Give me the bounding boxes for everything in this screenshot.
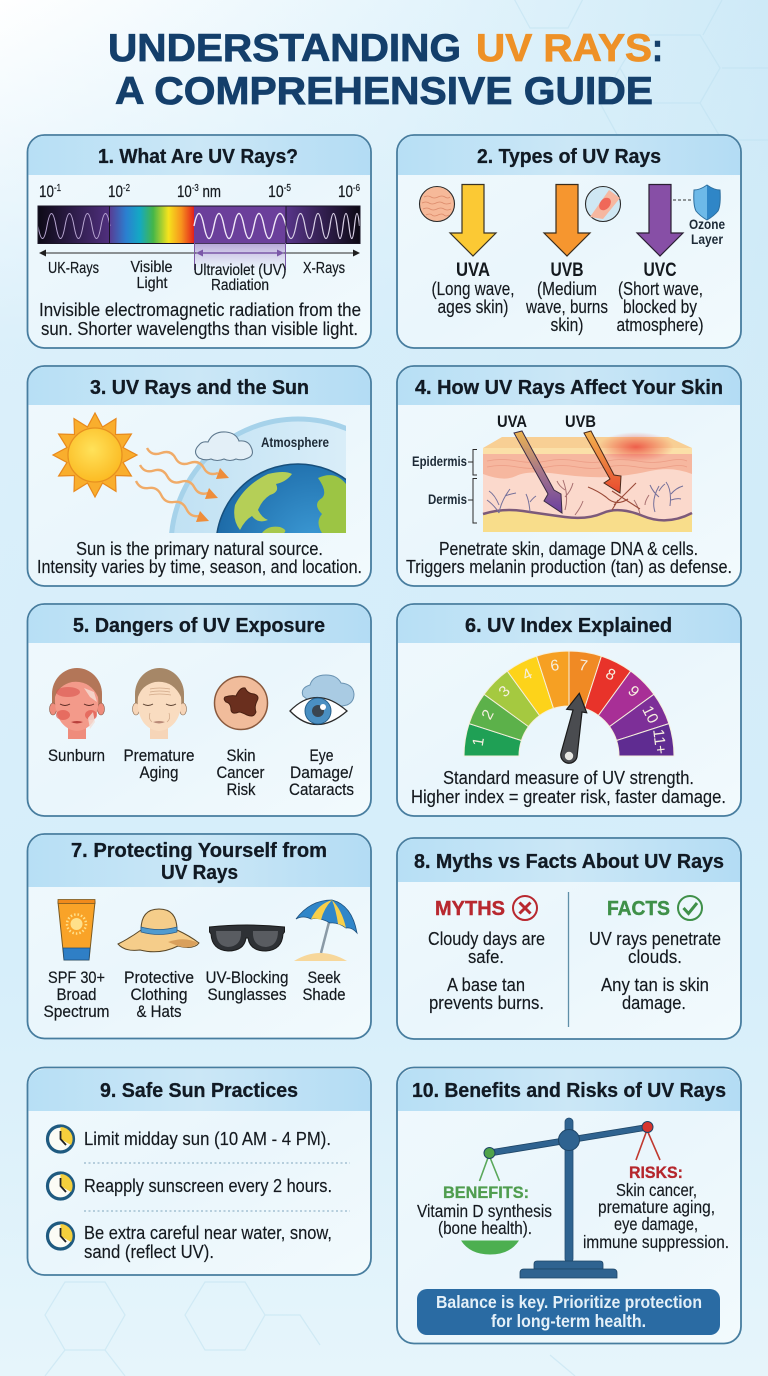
description 6 bbox=[411, 767, 726, 807]
UVA text: ages skin) bbox=[438, 296, 508, 317]
gauge numbers bbox=[470, 657, 669, 755]
description 6: Standard measure of UV strength. bbox=[443, 767, 694, 788]
danger labels: Skin bbox=[226, 746, 256, 765]
gauge numbers: 6 bbox=[549, 657, 560, 675]
benefits text and bowl: Vitamin D synthesis bbox=[417, 1201, 552, 1221]
gauge numbers: 4 bbox=[520, 665, 535, 684]
UVC text: (Short wave, bbox=[618, 278, 703, 299]
description 1 bbox=[39, 299, 361, 339]
atmosphere label: Atmosphere bbox=[261, 434, 329, 450]
icon: clock 1 bbox=[48, 1126, 74, 1152]
danger labels: Premature bbox=[124, 746, 194, 765]
danger labels: Risk bbox=[226, 780, 256, 799]
heading 4: 4. How UV Rays Affect Your Skin bbox=[415, 376, 723, 399]
heading 9: 9. Safe Sun Practices bbox=[100, 1079, 298, 1102]
wavelength scale numbers: -6 bbox=[353, 183, 360, 194]
myths column: prevents burns. bbox=[429, 992, 544, 1013]
UVB text: UVB bbox=[550, 260, 584, 281]
balance callout banner: Balance is key. Prioritize protection bbox=[436, 1292, 702, 1312]
tip 1: Limit midday sun (10 AM - 4 PM). bbox=[84, 1128, 331, 1149]
myths column: Cloudy days are bbox=[428, 928, 545, 949]
arrows: wavy UV rays bbox=[136, 448, 229, 522]
UVC text: blocked by bbox=[623, 296, 698, 317]
ozone shield and label: Layer bbox=[691, 231, 723, 247]
ozone shield and label bbox=[673, 185, 725, 247]
UVA text: UVA bbox=[456, 260, 490, 281]
arrow: UVA into skin: UVA bbox=[497, 412, 527, 431]
arrow: UVA into skin bbox=[497, 412, 562, 513]
protection labels: UV-Blocking bbox=[206, 968, 288, 987]
risks text: eye damage, bbox=[614, 1214, 698, 1234]
spectrum labels: UK-Rays bbox=[48, 260, 99, 277]
danger labels: Eye bbox=[310, 746, 334, 765]
wavelength scale numbers: -2 bbox=[123, 183, 130, 194]
ozone shield and label: Ozone bbox=[689, 216, 725, 232]
heading 5: 5. Dangers of UV Exposure bbox=[73, 614, 325, 637]
heading 6: 6. UV Index Explained bbox=[465, 614, 672, 637]
icon: damaged eye with cloud bbox=[290, 675, 354, 724]
wavelength scale numbers: 10 bbox=[177, 182, 196, 201]
protection labels: & Hats bbox=[136, 1002, 182, 1021]
title: UV RAYS bbox=[476, 27, 652, 70]
icon: sunglasses bbox=[210, 925, 284, 951]
wavelength scale numbers: 10 bbox=[268, 182, 287, 201]
tip 3: sand (reflect UV). bbox=[84, 1241, 214, 1262]
icon: premature aging face bbox=[132, 668, 186, 739]
gauge numbers: 2 bbox=[479, 707, 498, 722]
gauge numbers: 7 bbox=[578, 657, 589, 675]
wavelength scale numbers: -5 bbox=[284, 183, 291, 194]
risks text: RISKS: bbox=[629, 1163, 683, 1182]
panel: 8 myths vs facts bbox=[397, 838, 741, 1039]
heading 2: 2. Types of UV Rays bbox=[477, 145, 661, 168]
UVB text bbox=[525, 260, 608, 335]
gauge numbers: 9 bbox=[624, 683, 642, 701]
wavelength scale numbers: nm bbox=[199, 182, 221, 201]
facts column: FACTS bbox=[607, 898, 670, 920]
risks text: immune suppression. bbox=[583, 1232, 729, 1252]
wavelength scale numbers bbox=[39, 182, 360, 201]
icon: sun bbox=[53, 413, 137, 497]
UVB text: skin) bbox=[550, 314, 584, 335]
epidermis and dermis labels: Epidermis bbox=[412, 453, 467, 469]
UVA text bbox=[432, 260, 514, 317]
panel: 10 benefits and risks bbox=[397, 1068, 741, 1344]
gauge numbers: 3 bbox=[496, 683, 514, 701]
spectrum labels bbox=[48, 259, 345, 294]
risks text bbox=[583, 1163, 729, 1252]
protection labels: Clothing bbox=[130, 985, 188, 1004]
balance callout banner: for long-term health. bbox=[491, 1311, 646, 1331]
icon: sun hat bbox=[118, 909, 199, 952]
UVA text: (Long wave, bbox=[432, 278, 514, 299]
icon: clock 2 bbox=[48, 1173, 74, 1199]
spectrum labels: Radiation bbox=[211, 277, 269, 294]
wavelength scale numbers: 10 bbox=[108, 182, 127, 201]
protection labels: Spectrum bbox=[44, 1002, 110, 1021]
description 3 bbox=[37, 538, 362, 577]
icon: skin cancer mole bbox=[214, 676, 268, 730]
panel: 3 UV rays and the sun bbox=[26, 365, 372, 587]
protection labels: Sunglasses bbox=[208, 985, 286, 1004]
epidermis and dermis labels: Dermis bbox=[428, 491, 467, 507]
balance callout banner bbox=[417, 1289, 720, 1335]
tip 3: Be extra careful near water, snow, bbox=[84, 1222, 332, 1243]
arrow: UVA bbox=[450, 184, 496, 256]
protection labels: Seek bbox=[308, 968, 341, 987]
gauge numbers: 10 bbox=[638, 703, 661, 727]
icon: sunscreen tube bbox=[58, 900, 95, 960]
protection labels: Broad bbox=[56, 985, 96, 1004]
description 4: Penetrate skin, damage DNA & cells. bbox=[439, 538, 698, 559]
description 4: Triggers melanin production (tan) as defense. bbox=[406, 556, 732, 577]
myths column bbox=[428, 896, 545, 1013]
heading 7: 7. Protecting Yourself from bbox=[71, 839, 327, 862]
icon: clock 3 bbox=[48, 1223, 74, 1249]
UVC text: atmosphere) bbox=[616, 314, 704, 335]
panel: 5 dangers of UV exposure bbox=[28, 604, 371, 816]
facts column: UV rays penetrate bbox=[589, 928, 721, 949]
panel: 4 how UV rays affect your skin bbox=[397, 366, 741, 586]
gauge needle bbox=[561, 693, 587, 763]
earth and atmosphere bbox=[169, 416, 346, 533]
wavelength scale numbers: -1 bbox=[54, 183, 61, 194]
benefits text and bowl: BENEFITS: bbox=[443, 1183, 529, 1202]
spectrum labels: Ultraviolet (UV) bbox=[194, 262, 286, 279]
UVB text: wave, burns bbox=[525, 296, 608, 317]
protection labels: SPF 30+ bbox=[48, 968, 105, 987]
heading 7: UV Rays bbox=[161, 861, 238, 884]
spectrum labels: X-Rays bbox=[303, 260, 345, 277]
cloud bbox=[196, 432, 252, 460]
arrow: UVB bbox=[544, 184, 590, 256]
risks text: premature aging, bbox=[598, 1197, 715, 1217]
heading 1: 1. What Are UV Rays? bbox=[98, 145, 298, 168]
tip 3 bbox=[84, 1222, 332, 1262]
panel: 9 safe sun practices bbox=[28, 1068, 371, 1275]
facts column bbox=[589, 896, 721, 1013]
heading 8: 8. Myths vs Facts About UV Rays bbox=[414, 850, 724, 873]
myths column: A base tan bbox=[447, 974, 525, 995]
myths column: safe. bbox=[468, 946, 504, 967]
heading 3: 3. UV Rays and the Sun bbox=[90, 376, 309, 399]
benefits text and bowl bbox=[417, 1183, 552, 1254]
icon: sunburn face bbox=[50, 668, 104, 739]
protection labels bbox=[44, 968, 346, 1021]
title: UNDERSTANDING bbox=[108, 27, 461, 70]
description 3: Intensity varies by time, season, and location. bbox=[37, 556, 362, 577]
description 3: Sun is the primary natural source. bbox=[76, 538, 323, 559]
description 6: Higher index = greater risk, faster damage. bbox=[411, 786, 726, 807]
description 1: sun. Shorter wavelengths than visible light. bbox=[41, 318, 358, 339]
divider bbox=[568, 892, 570, 1027]
spectrum labels: Light bbox=[136, 275, 168, 292]
panel: 1 what are UV rays bbox=[28, 135, 371, 348]
myths column: MYTHS bbox=[435, 898, 505, 920]
title bbox=[108, 27, 663, 113]
facts column: damage. bbox=[622, 992, 686, 1013]
UVB text: (Medium bbox=[537, 278, 597, 299]
panel: 7 protecting yourself bbox=[28, 834, 371, 1038]
benefits text and bowl: (bone health). bbox=[438, 1218, 532, 1238]
UVC text: UVC bbox=[644, 260, 677, 281]
danger labels: Cataracts bbox=[289, 780, 354, 799]
arrow: UVC bbox=[637, 184, 683, 256]
balance scale bbox=[480, 1118, 660, 1278]
tip 2: Reapply sunscreen every 2 hours. bbox=[84, 1175, 332, 1196]
danger labels: Cancer bbox=[216, 763, 265, 782]
UV index gauge bbox=[464, 651, 674, 756]
danger labels: Aging bbox=[140, 763, 178, 782]
protection labels: Protective bbox=[124, 968, 194, 987]
skin cross-section bbox=[483, 432, 692, 532]
gauge numbers: 11+ bbox=[649, 728, 669, 755]
electromagnetic spectrum bar bbox=[38, 206, 360, 244]
danger labels: Damage/ bbox=[290, 763, 353, 782]
description 4 bbox=[406, 538, 732, 577]
wavelength scale numbers: 10 bbox=[338, 182, 357, 201]
gauge numbers: 1 bbox=[470, 736, 488, 747]
protection labels: Shade bbox=[302, 985, 346, 1004]
arrow: UVB into skin: UVB bbox=[565, 412, 596, 431]
arrow: UVB into skin bbox=[565, 412, 621, 493]
facts column: Any tan is skin bbox=[601, 974, 709, 995]
wavelength scale numbers: -3 bbox=[192, 183, 199, 194]
UVC text bbox=[616, 260, 704, 335]
facts column: clouds. bbox=[628, 946, 682, 967]
description 1: Invisible electromagnetic radiation from the bbox=[39, 299, 361, 320]
danger labels bbox=[48, 746, 354, 799]
danger labels: Sunburn bbox=[48, 746, 105, 765]
gauge numbers: 8 bbox=[603, 665, 618, 684]
icon: burned skin bbox=[586, 186, 620, 222]
risks text: Skin cancer, bbox=[616, 1180, 697, 1200]
panel: 2 types of UV rays bbox=[397, 135, 741, 348]
heading 7 bbox=[71, 839, 327, 884]
heading 10: 10. Benefits and Risks of UV Rays bbox=[412, 1079, 726, 1102]
wavelength scale numbers: 10 bbox=[39, 182, 58, 201]
title: A COMPREHENSIVE GUIDE bbox=[115, 70, 653, 113]
panel: 6 UV index explained bbox=[397, 604, 741, 816]
epidermis and dermis labels bbox=[412, 450, 477, 523]
spectrum axis with UV range bbox=[39, 243, 360, 272]
title: : bbox=[652, 27, 663, 70]
spectrum labels: Visible bbox=[130, 259, 173, 276]
icon: beach umbrella bbox=[294, 900, 357, 961]
icon: wrinkled skin bbox=[420, 186, 454, 222]
